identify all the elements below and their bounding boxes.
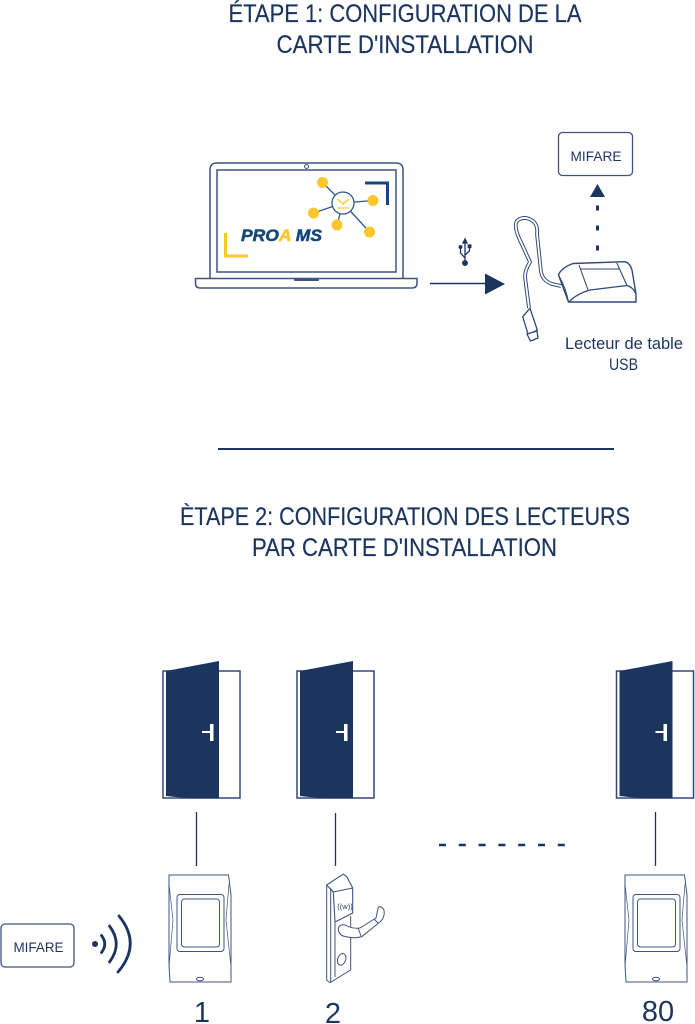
- label: USB desktop reader: USB: [609, 356, 638, 374]
- icon: laptop with PROA MS screen: [196, 163, 417, 288]
- card: MIFARE bottom: [1, 924, 74, 967]
- icon: door 80: [616, 661, 694, 798]
- title: step 1: [228, 0, 582, 59]
- arrow: dashed reader to card: [590, 184, 605, 250]
- title: step 2: ÈTAPE 2: CONFIGURATION DES LECTEURS: [180, 502, 630, 531]
- card: MIFARE top: [558, 132, 632, 176]
- title: step 1: CARTE D'INSTALLATION: [276, 31, 534, 59]
- network diagram: [308, 177, 378, 238]
- logo text: PROA MS: [241, 227, 322, 245]
- card: MIFARE top: MIFARE: [570, 149, 622, 164]
- icon: door 2: [297, 661, 374, 798]
- icon: door lock handle: ((w)): [337, 902, 353, 911]
- icon: USB desktop reader with cable: [516, 218, 636, 341]
- title: step 2: PAR CARTE D'INSTALLATION: [252, 534, 557, 562]
- icon: USB symbol: [459, 239, 471, 265]
- arrow: laptop to reader: [430, 274, 505, 294]
- connector lines: [196, 812, 656, 866]
- title: step 2: [180, 502, 630, 562]
- label: USB desktop reader: Lecteur de table: [565, 335, 683, 353]
- icon: wireless signal waves: [92, 916, 130, 972]
- label: USB desktop reader: [565, 335, 683, 374]
- icon: door lock handle: [327, 874, 384, 983]
- dashed ellipsis: [439, 844, 565, 846]
- icon: door 1: [163, 661, 240, 798]
- card: MIFARE bottom: MIFARE: [14, 940, 64, 955]
- title: step 1: ÉTAPE 1: CONFIGURATION DE LA: [228, 0, 582, 28]
- icon: wall reader 1: [169, 875, 231, 982]
- icon: wall reader 80: [625, 875, 687, 982]
